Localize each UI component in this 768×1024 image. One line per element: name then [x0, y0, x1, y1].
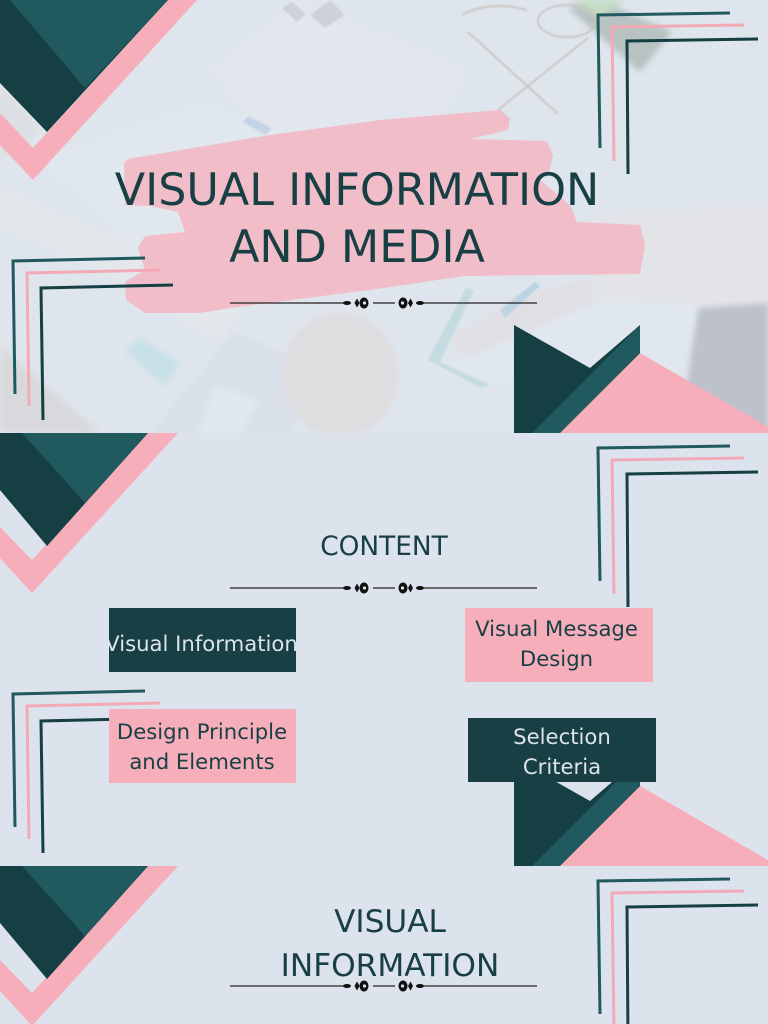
box: design principle and elements: Design Principle: [117, 719, 287, 744]
box: design principle and elements: [109, 709, 296, 783]
box: visual message design: Visual Message: [475, 616, 638, 641]
box: selection criteria: [468, 718, 656, 782]
corner triangle: top-left: [0, 866, 178, 1024]
corner triangle: bottom-right: [514, 758, 768, 866]
box: visual message design: [465, 608, 653, 682]
corner triangle: top-left: [0, 433, 178, 593]
box: visual message design: Design: [520, 646, 593, 671]
corner triangle: bottom-right: [514, 325, 768, 433]
heading: visual information: INFORMATION: [281, 948, 499, 984]
corner lines: top-right: [598, 446, 758, 607]
ornamental divider: [230, 582, 537, 594]
corner lines: left: [13, 258, 173, 420]
title: AND MEDIA: [229, 222, 485, 273]
heading: content: CONTENT: [320, 531, 449, 562]
box: visual information: Visual Information: [105, 631, 298, 656]
ornamental divider: [230, 298, 537, 308]
background photo: desk scene: [0, 0, 768, 437]
title: VISUAL INFORMATION: [115, 165, 599, 216]
box: design principle and elements: and Elements: [129, 749, 275, 774]
panel: title slide: [0, 0, 768, 437]
corner lines: top-right: [598, 13, 758, 174]
corner lines: top-right: [598, 879, 758, 1024]
panel: content slide: [0, 433, 768, 866]
ornamental divider: [230, 980, 537, 992]
box: selection criteria: Selection: [513, 724, 611, 749]
heading: visual information: VISUAL: [334, 904, 447, 940]
pink brush stroke behind title: [124, 110, 645, 313]
corner lines: left: [13, 691, 173, 853]
corner triangle: top-left: [0, 0, 197, 180]
box: selection criteria: Criteria: [523, 754, 601, 779]
box: visual information: [105, 608, 298, 672]
panel: visual information slide: [0, 866, 758, 1024]
